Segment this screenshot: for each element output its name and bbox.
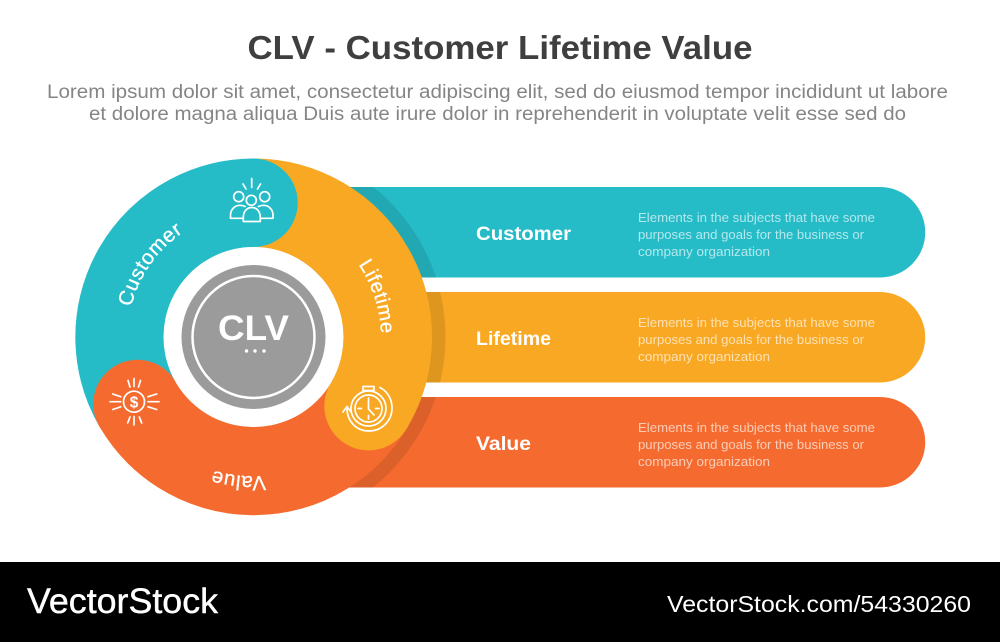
watermark footer band	[0, 562, 1000, 642]
icon: stopwatch	[343, 386, 392, 431]
lifetime bar description: company organization	[638, 349, 770, 364]
curved label: Value: Value	[212, 471, 266, 491]
curved label: Lifetime: Lifetime	[359, 258, 392, 332]
value bar description	[638, 420, 875, 469]
curved label: Customer: Customer	[119, 224, 180, 305]
icon: customer group	[230, 178, 273, 222]
lifetime bar description: Elements in the subjects that have some	[638, 315, 875, 330]
three dots	[245, 349, 266, 353]
lifetime bar heading: Lifetime	[476, 329, 551, 350]
icon: dollar burst: $	[130, 394, 139, 412]
icon: dollar burst	[110, 378, 159, 425]
customer bar description: Elements in the subjects that have some	[638, 210, 875, 225]
value bar description: Elements in the subjects that have some	[638, 420, 875, 435]
center white ring	[164, 247, 344, 427]
panel: lifetime bar	[300, 292, 925, 382]
customer bar description: company organization	[638, 244, 770, 259]
customer bar description	[638, 210, 875, 259]
title: CLV - Customer Lifetime Value	[248, 29, 752, 66]
value bar heading: Value	[476, 434, 531, 455]
center badge	[182, 265, 326, 409]
subtitle text: et dolore magna aliqua Duis aute irure dolor in reprehenderit in voluptate velit esse sed do	[89, 104, 906, 125]
footer logo: VectorStock	[27, 582, 219, 621]
lifetime bar description: purposes and goals for the business or	[638, 332, 865, 347]
value bar description: purposes and goals for the business or	[638, 437, 865, 452]
CLV label: CLV	[218, 309, 290, 348]
panel: value bar	[300, 397, 925, 488]
panel: circular diagram	[75, 158, 432, 516]
footer url: VectorStock.com/54330260	[667, 591, 971, 617]
panel: customer bar	[300, 187, 925, 278]
subtitle text	[47, 82, 948, 125]
customer bar heading: Customer	[476, 224, 572, 245]
value bar description: company organization	[638, 454, 770, 469]
lifetime bar description	[638, 315, 875, 364]
customer bar description: purposes and goals for the business or	[638, 227, 865, 242]
subtitle text: Lorem ipsum dolor sit amet, consectetur adipiscing elit, sed do eiusmod tempor incididunt ut labore	[47, 82, 948, 103]
circle shadow on bars	[338, 187, 446, 488]
